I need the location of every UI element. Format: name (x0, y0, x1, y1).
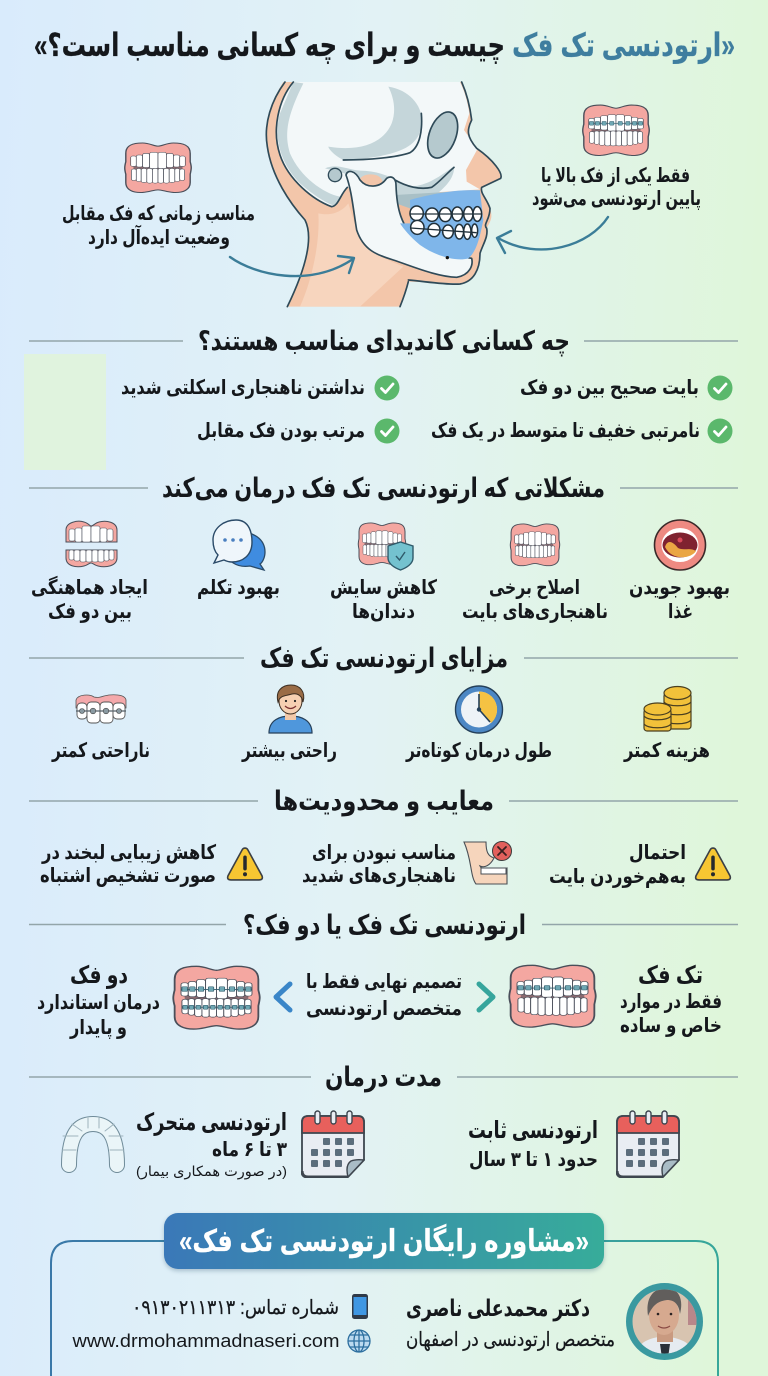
duration: fixed braces: حدود ۱ تا ۳ سال (469, 1149, 598, 1171)
drawback: reduced smile aesthetics: کاهش زیبایی لبخند در (41, 842, 216, 864)
drawback: unsuitable for severe cases: مناسب نبودن برای (312, 842, 456, 864)
icon: teeth with shield (358, 523, 413, 570)
consultation banner: «مشاوره رایگان ارتودنسی تک فک» (179, 1223, 589, 1259)
drawback: reduced smile aesthetics (40, 842, 262, 887)
comparison: both jaws text: و پایدار (69, 1017, 127, 1040)
advantage: shorter duration (405, 686, 552, 762)
problem: chewing: بهبود جویدن (629, 577, 730, 599)
comparison: decision text (306, 971, 462, 1020)
icon: open mouth (654, 520, 706, 570)
icon: clock (456, 686, 502, 733)
advantage: more comfort (241, 685, 337, 762)
arrow: left callout to jaw (230, 256, 354, 276)
comparison: decision text: تصمیم نهایی فقط با (306, 971, 462, 993)
duration: removable braces (136, 1109, 364, 1180)
comparison: single jaw text: تک فک (638, 962, 703, 989)
icon: double-arch braces teeth (173, 966, 260, 1029)
phone contact: شماره تماس: ۰۹۱۳۰۲۱۱۳۱۳ (132, 1297, 339, 1319)
icon: braces teeth (76, 695, 126, 723)
advantage: less discomfort (51, 695, 150, 762)
doctor name and specialty: متخصص ارتودنسی در اصفهان (406, 1329, 615, 1351)
icon: single-arch braces teeth (509, 965, 596, 1027)
callout text: right: پایین ارتودنسی می‌شود (532, 188, 701, 211)
drawback: unsuitable for severe cases: ناهنجاری‌های شدید (302, 865, 456, 887)
duration: fixed braces: ارتودنسی ثابت (468, 1117, 598, 1144)
chevron: teal (479, 984, 493, 1010)
duration: removable braces: (در صورت همکاری بیمار) (136, 1163, 287, 1180)
comparison: single jaw text (620, 962, 722, 1037)
doctor name and specialty: دکتر محمدعلی ناصری (406, 1295, 590, 1322)
advantage: more comfort: راحتی بیشتر (241, 740, 337, 762)
comparison: both jaws text (37, 962, 160, 1040)
problem: bite correction: اصلاح برخی (489, 577, 580, 599)
candidate item 4: مرتب بودن فک مقابل (197, 420, 365, 442)
callout text: right (532, 165, 701, 211)
candidate item 3: نداشتن ناهنجاری اسکلتی شدید (121, 377, 365, 399)
comparison: single jaw text: فقط در موارد (620, 991, 722, 1013)
problem: bite correction: ناهنجاری‌های بایت (462, 601, 608, 623)
heading: advantages: مزایای ارتودنسی تک فک (260, 643, 508, 674)
icon: globe (348, 1330, 370, 1352)
problem: chewing: غذا (668, 601, 693, 623)
advantage: lower cost: هزینه کمتر (623, 740, 710, 762)
drawback: bite disruption: احتمال (629, 842, 686, 864)
callout text: left: وضعیت ایده‌آل دارد (88, 224, 230, 249)
heading: treatment duration: مدت درمان (325, 1062, 442, 1093)
advantage: less discomfort: ناراحتی کمتر (51, 740, 150, 762)
website contact: www.drmohammadnaseri.com (71, 1331, 340, 1351)
title: چیست و برای چه کسانی مناسب است؟» (34, 27, 505, 64)
comparison: decision text: متخصص ارتودنسی (306, 998, 462, 1020)
consultation panel (51, 1213, 718, 1376)
heading: problems treated: مشکلاتی که ارتودنسی تک فک درمان می‌کند (162, 473, 605, 504)
problem: tooth wear (330, 523, 437, 623)
icon: clear aligner (62, 1118, 124, 1165)
drawback: bite disruption: به‌هم‌خوردن بایت (549, 866, 686, 888)
duration: removable braces: ۳ تا ۶ ماه (212, 1139, 287, 1161)
problem: jaw harmony: بین دو فک (48, 601, 132, 623)
duration: removable braces: ارتودنسی متحرک (136, 1109, 287, 1136)
problem: jaw harmony (31, 521, 148, 623)
icon: coins (644, 686, 691, 731)
callout text: right: فقط یکی از فک بالا یا (541, 165, 690, 187)
drawback: reduced smile aesthetics: صورت تشخیص اشتباه (40, 865, 216, 887)
heading: drawbacks: معایب و محدودیت‌ها (274, 786, 494, 817)
candidate item 1: بایت صحیح بین دو فک (520, 377, 699, 399)
skull illustration (266, 82, 501, 307)
right callout (532, 105, 701, 211)
icon: denture with braces on one arch (583, 105, 649, 155)
icon: phone (352, 1294, 368, 1319)
comparison: both jaws text: دو فک (70, 962, 128, 989)
drawback: unsuitable for severe cases (302, 842, 512, 887)
arrow: right callout to mouth (497, 217, 608, 253)
icon: smiling person (269, 685, 312, 733)
problem: speech: بهبود تکلم (197, 577, 280, 599)
problem: speech (197, 520, 280, 599)
heading: candidates: چه کسانی کاندیدای مناسب هستند؟ (198, 326, 570, 357)
panel frame (51, 1241, 718, 1376)
candidate item 2: نامرتبی خفیف تا متوسط در یک فک (431, 420, 700, 442)
chevron: blue (276, 984, 290, 1010)
green placeholder block (24, 354, 106, 470)
icon: chat bubbles (213, 520, 265, 570)
problem: tooth wear: دندان‌ها (352, 601, 415, 623)
comparison: both jaws text: درمان استاندارد (37, 992, 160, 1014)
icon: irregular teeth (510, 524, 560, 566)
advantage: lower cost (623, 686, 710, 762)
consultation banner (164, 1213, 604, 1269)
problem: tooth wear: کاهش سایش (330, 577, 437, 599)
doctor name and specialty (406, 1295, 615, 1351)
icon: healthy denture (125, 143, 191, 192)
doctor photo (626, 1283, 703, 1360)
heading: one jaw or two: ارتودنسی تک فک یا دو فک؟ (243, 910, 526, 941)
callout text: left (62, 203, 255, 249)
icon: separated teeth (66, 521, 117, 567)
problem: chewing (629, 520, 730, 623)
icon: jaw with red x (464, 842, 512, 884)
drawback: bite disruption (549, 842, 730, 888)
left callout (62, 143, 255, 249)
problem: jaw harmony: ایجاد هماهنگی (31, 575, 148, 599)
comparison: single jaw text: خاص و ساده (620, 1015, 722, 1037)
problem: bite correction (462, 524, 608, 623)
advantage: shorter duration: طول درمان کوتاه‌تر (405, 740, 552, 762)
duration: fixed braces (468, 1111, 679, 1177)
callout text: left: مناسب زمانی که فک مقابل (62, 203, 255, 225)
